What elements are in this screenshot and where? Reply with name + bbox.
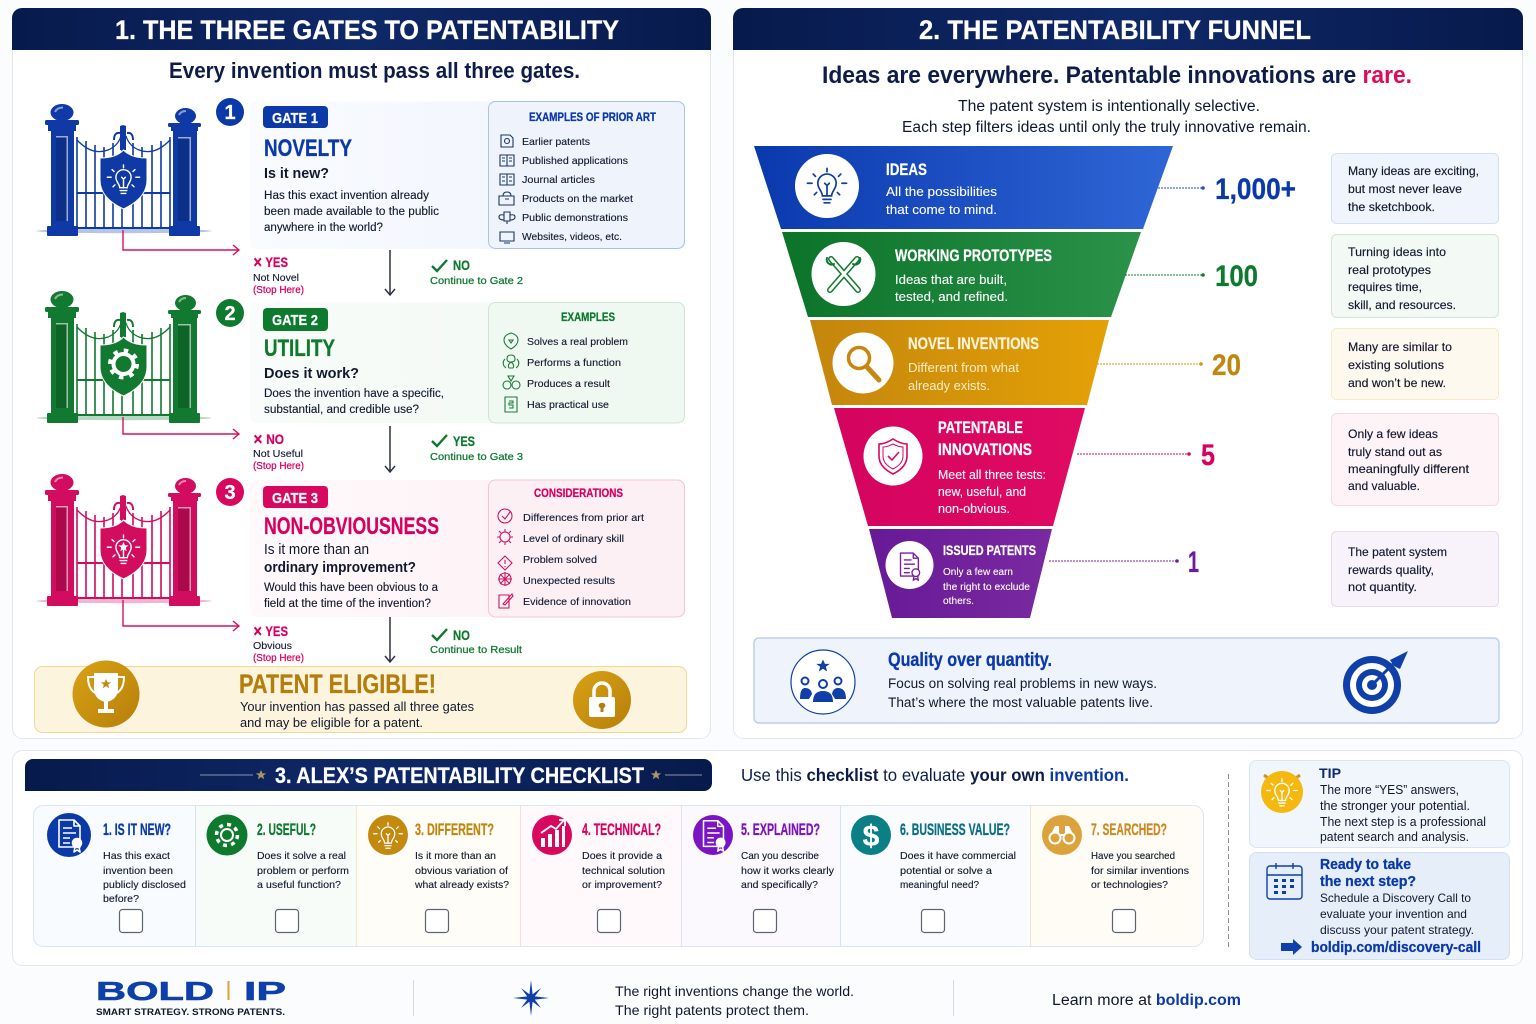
examples of prior art box: Public demonstrations bbox=[522, 212, 628, 224]
tip box: The more “YES” answers, bbox=[1320, 783, 1459, 797]
considerations box: Evidence of innovation bbox=[523, 596, 631, 608]
gate 2 no outcome: Not Useful bbox=[253, 448, 303, 460]
non-obviousness question: ordinary improvement? bbox=[264, 560, 416, 576]
logo: Bold IP: BOLD bbox=[96, 976, 214, 1006]
stat: 5 bbox=[1077, 439, 1215, 472]
gate 3 yes outcome: (Stop Here) bbox=[253, 652, 304, 664]
checklist item 3 bbox=[368, 815, 509, 932]
note card: issued bbox=[1332, 532, 1498, 606]
quality over quantity callout: That’s where the most valuable patents live. bbox=[888, 695, 1153, 710]
checklist item 6: $ bbox=[863, 820, 880, 853]
checklist item 5: and specifically? bbox=[741, 879, 818, 891]
funnel tier: working prototypes bbox=[782, 232, 1141, 317]
gate 1 yes outcome: ✕ YES bbox=[253, 255, 288, 270]
funnel tier: novel inventions: Different from what bbox=[908, 360, 1019, 375]
tip box: The next step is a professional bbox=[1320, 815, 1486, 829]
non-obviousness description: field at the time of the invention? bbox=[264, 598, 431, 610]
stat: 1,000+: 1,000+ bbox=[1215, 173, 1296, 206]
tip box: the stronger your potential. bbox=[1320, 799, 1470, 813]
funnel tier: patentable innovations: new, useful, and bbox=[938, 485, 1026, 499]
checklist item 5: 5. EXPLAINED? bbox=[741, 820, 820, 839]
gate 1 label: GATE 1 bbox=[272, 110, 318, 127]
funnel tier: novel inventions: already exists. bbox=[908, 378, 990, 393]
logo: Bold IP bbox=[96, 976, 286, 1018]
checklist item 2: a useful function? bbox=[257, 879, 341, 891]
funnel tier: issued patents bbox=[869, 529, 1052, 618]
gate 1 label bbox=[263, 106, 328, 128]
footer tagline: The right inventions change the world. bbox=[615, 983, 854, 999]
examples box: Has practical use bbox=[527, 399, 609, 411]
note card: issued: rewards quality, bbox=[1348, 563, 1434, 577]
considerations box: Level of ordinary skill bbox=[523, 533, 624, 545]
next step box: Ready to take bbox=[1320, 856, 1411, 873]
gate 2 no outcome: (Stop Here) bbox=[253, 460, 304, 472]
icon: tip lightbulb bbox=[1261, 771, 1303, 813]
checklist item 3: 3. DIFFERENT? bbox=[415, 820, 494, 839]
funnel tier: working prototypes: tested, and refined. bbox=[895, 289, 1008, 304]
icon: target with arrow bbox=[1343, 651, 1408, 714]
note card: issued: The patent system bbox=[1348, 545, 1447, 559]
gate 3 card bbox=[216, 478, 685, 617]
considerations box: CONSIDERATIONS bbox=[534, 486, 623, 500]
icon: blue gate with lightbulb shield bbox=[36, 104, 212, 236]
novelty question: Is it new? bbox=[264, 165, 329, 182]
examples of prior art box: Published applications bbox=[522, 155, 628, 167]
number badge 2 bbox=[216, 299, 244, 327]
arrow: gate 3 to result bbox=[385, 617, 395, 662]
panel: patentability checklist bbox=[12, 750, 1522, 966]
arrow: gate 2 to gate 3 bbox=[385, 426, 395, 472]
note card: prototypes: real prototypes bbox=[1348, 263, 1431, 277]
note card: prototypes: Turning ideas into bbox=[1348, 245, 1446, 259]
footer link: Learn more at boldip.com bbox=[1052, 992, 1241, 1009]
funnel tier: patentable innovations: INNOVATIONS bbox=[938, 440, 1032, 459]
considerations box: Unexpected results bbox=[523, 575, 615, 587]
note card: novel: existing solutions bbox=[1348, 358, 1444, 372]
checklist item 4 bbox=[532, 815, 665, 932]
note card: prototypes: requires time, bbox=[1348, 280, 1422, 294]
note card: ideas: the sketchbook. bbox=[1348, 200, 1435, 214]
checklist item 6: meaningful need? bbox=[900, 879, 979, 891]
quality over quantity callout: Quality over quantity. bbox=[888, 650, 1052, 671]
next step box: boldip.com/discovery-call bbox=[1311, 939, 1481, 956]
section heading 3 bbox=[25, 759, 712, 791]
checklist item 1: publicly disclosed bbox=[103, 879, 186, 891]
eligible title: PATENT ELIGIBLE! bbox=[239, 669, 436, 699]
checklist item 5: how it works clearly bbox=[741, 865, 835, 877]
examples box: Solves a real problem bbox=[527, 336, 628, 348]
checklist item 5: Can you describe bbox=[741, 850, 819, 862]
eligible description bbox=[240, 699, 474, 730]
note card: patentable: and valuable. bbox=[1348, 479, 1420, 493]
checklist columns bbox=[33, 805, 1204, 947]
stat: 20 bbox=[1097, 349, 1241, 382]
examples box: EXAMPLES bbox=[561, 310, 615, 324]
section heading 1 bbox=[12, 8, 711, 50]
non-obviousness description: Would this have been obvious to a bbox=[264, 582, 439, 594]
note card: patentable: truly stand out as bbox=[1348, 445, 1442, 459]
funnel tier: patentable innovations bbox=[834, 408, 1085, 526]
gate 1 no outcome: NO bbox=[453, 258, 470, 273]
considerations box bbox=[488, 480, 684, 617]
number badge 2: 2 bbox=[224, 303, 236, 325]
non-obviousness title: NON-OBVIOUSNESS bbox=[264, 513, 439, 540]
note card: issued: not quantity. bbox=[1348, 580, 1417, 594]
checklist item 7: or technologies? bbox=[1091, 879, 1168, 891]
gate 1 no outcome: Continue to Gate 2 bbox=[430, 275, 523, 287]
icon: pink gate with star bulb shield bbox=[36, 474, 212, 606]
gate 2 no outcome bbox=[253, 432, 304, 472]
checklist item 4: Does it provide a bbox=[582, 850, 662, 862]
checklist item 6: Does it have commercial bbox=[900, 850, 1016, 862]
utility title: UTILITY bbox=[264, 335, 335, 362]
section heading 2: 2. THE PATENTABILITY FUNNEL bbox=[919, 15, 1311, 45]
gate 2 card bbox=[216, 299, 685, 423]
eligible description: and may be eligible for a patent. bbox=[240, 715, 423, 730]
novelty description: been made available to the public bbox=[264, 206, 439, 218]
next step box: the next step? bbox=[1320, 873, 1416, 890]
novelty title: NOVELTY bbox=[264, 135, 352, 162]
panel: patentability funnel bbox=[733, 8, 1523, 738]
number badge 3: 3 bbox=[224, 482, 236, 504]
checklist item 7: Have you searched bbox=[1091, 850, 1175, 862]
checklist item 7: for similar inventions bbox=[1091, 865, 1189, 877]
number badge 1 bbox=[216, 98, 244, 126]
icon: compass star bbox=[513, 980, 549, 1016]
checklist item 3: obvious variation of bbox=[415, 865, 508, 877]
subheading: Every invention must pass all three gates. bbox=[169, 58, 580, 83]
gate 3 yes outcome: ✕ YES bbox=[253, 624, 288, 639]
icon: padlock bbox=[573, 671, 631, 729]
funnel tier: issued patents: the right to exclude bbox=[943, 581, 1030, 593]
footer tagline bbox=[615, 983, 854, 1018]
examples of prior art box: Earlier patents bbox=[522, 136, 590, 148]
note card: ideas: Many ideas are exciting, bbox=[1348, 164, 1479, 178]
checklist item 4: or improvement? bbox=[582, 879, 662, 891]
funnel intro text: Each step filters ideas until only the truly innovative remain. bbox=[902, 119, 1311, 136]
tip box bbox=[1250, 760, 1510, 848]
checklist item 2: Does it solve a real bbox=[257, 850, 346, 862]
gate 2 yes outcome: Continue to Gate 3 bbox=[430, 451, 523, 463]
funnel tier: ideas: IDEAS bbox=[886, 160, 927, 179]
novelty description bbox=[264, 190, 439, 234]
gate 1 yes outcome: (Stop Here) bbox=[253, 284, 304, 296]
checklist item 3: what already exists? bbox=[414, 879, 509, 891]
funnel tier: patentable innovations: non-obvious. bbox=[938, 502, 1010, 516]
note card: ideas: but most never leave bbox=[1348, 182, 1462, 196]
number badge 3 bbox=[216, 478, 244, 506]
logo: Bold IP: SMART STRATEGY. STRONG PATENTS. bbox=[96, 1007, 285, 1018]
checklist item 4: 4. TECHNICAL? bbox=[582, 820, 661, 839]
examples box: Performs a function bbox=[527, 357, 621, 369]
gate 3 no outcome bbox=[430, 628, 522, 656]
funnel tier: working prototypes: Ideas that are built, bbox=[895, 272, 1007, 287]
novelty description: Has this exact invention already bbox=[264, 190, 429, 202]
gate 2 yes outcome: YES bbox=[453, 434, 475, 449]
icon: calendar bbox=[1267, 863, 1302, 899]
note card: patentable bbox=[1332, 414, 1498, 506]
gate 3 label: GATE 3 bbox=[272, 490, 318, 507]
non-obviousness question: Is it more than an bbox=[264, 542, 369, 558]
utility description: substantial, and credible use? bbox=[264, 404, 419, 416]
arrow: gate 2 stop bbox=[123, 417, 239, 439]
gate 2 label: GATE 2 bbox=[272, 312, 318, 329]
checklist item 1: Has this exact bbox=[103, 850, 170, 862]
novelty description: anywhere in the world? bbox=[264, 222, 383, 234]
checklist item 1: before? bbox=[103, 893, 139, 905]
icon: team with star bbox=[791, 650, 855, 714]
stat: 20: 20 bbox=[1212, 349, 1241, 382]
patent eligible banner bbox=[34, 660, 686, 732]
note card: ideas bbox=[1332, 154, 1498, 224]
examples of prior art box: Websites, videos, etc. bbox=[522, 231, 622, 243]
stat: 1 bbox=[1049, 546, 1199, 579]
checklist item 7 bbox=[1042, 815, 1189, 932]
gate 3 yes outcome: Obvious bbox=[253, 640, 292, 652]
gate 1 yes outcome bbox=[253, 255, 304, 296]
funnel tier: novel inventions: NOVEL INVENTIONS bbox=[908, 334, 1039, 353]
checklist item 6: potential or solve a bbox=[900, 865, 992, 877]
checklist item 1: 1. IS IT NEW? bbox=[103, 820, 171, 839]
section heading 1: 1. THE THREE GATES TO PATENTABILITY bbox=[115, 15, 619, 45]
funnel headline: Ideas are everywhere. Patentable innovations are rare. bbox=[822, 62, 1412, 89]
next step box bbox=[1250, 852, 1510, 960]
checklist item 7: 7. SEARCHED? bbox=[1091, 820, 1167, 839]
funnel tier: patentable innovations: PATENTABLE bbox=[938, 418, 1023, 437]
quality over quantity callout: Focus on solving real problems in new ways. bbox=[888, 676, 1157, 691]
note card: novel: Many are similar to bbox=[1348, 340, 1452, 354]
section heading 2 bbox=[733, 8, 1523, 50]
funnel tier: working prototypes: WORKING PROTOTYPES bbox=[895, 246, 1052, 265]
checklist item 2: 2. USEFUL? bbox=[257, 820, 316, 839]
gate 3 no outcome: Continue to Result bbox=[430, 644, 522, 656]
gate 3 yes outcome bbox=[253, 624, 304, 664]
gate 1 card bbox=[216, 98, 685, 249]
stat: 1,000+ bbox=[1158, 173, 1296, 206]
note card: prototypes: skill, and resources. bbox=[1348, 298, 1456, 312]
gate 3 no outcome: NO bbox=[453, 628, 470, 643]
next step box: Schedule a Discovery Call to bbox=[1320, 891, 1471, 905]
examples of prior art box bbox=[488, 102, 684, 248]
utility description: Does the invention have a specific, bbox=[264, 388, 444, 400]
non-obviousness question bbox=[264, 542, 416, 576]
checklist item 3: Is it more than an bbox=[415, 850, 496, 862]
stat: 100: 100 bbox=[1215, 260, 1258, 293]
checklist item 6: 6. BUSINESS VALUE? bbox=[900, 820, 1010, 839]
funnel intro text bbox=[902, 98, 1311, 136]
checklist item 4: technical solution bbox=[582, 865, 665, 877]
note card: novel: and won’t be new. bbox=[1348, 376, 1446, 390]
stat: 1: 1 bbox=[1188, 546, 1199, 579]
icon: trophy bbox=[72, 660, 140, 728]
note card: prototypes bbox=[1332, 234, 1498, 318]
arrow: gate 1 to gate 2 bbox=[385, 250, 395, 295]
logo: Bold IP: IP bbox=[244, 976, 286, 1006]
funnel tier: issued patents: others. bbox=[943, 595, 974, 607]
gate 2 yes outcome bbox=[430, 434, 523, 463]
examples of prior art box: Products on the market bbox=[522, 193, 633, 205]
number badge 1: 1 bbox=[224, 102, 236, 124]
examples box: Produces a result bbox=[527, 378, 610, 390]
tip box: patent search and analysis. bbox=[1320, 830, 1469, 844]
gate 1 no outcome bbox=[430, 258, 523, 287]
checklist item 1 bbox=[47, 813, 186, 932]
arrow: gate 3 stop bbox=[123, 600, 239, 631]
section heading 3: 3. ALEX’S PATENTABILITY CHECKLIST bbox=[275, 763, 644, 788]
stat: 100 bbox=[1125, 260, 1258, 293]
next step box: evaluate your invention and bbox=[1320, 907, 1467, 921]
footer bbox=[96, 976, 1241, 1018]
utility description bbox=[264, 388, 444, 416]
checklist item 2 bbox=[206, 814, 349, 932]
gate 2 label bbox=[263, 308, 328, 331]
tip box: TIP bbox=[1319, 765, 1341, 781]
examples of prior art box: Journal articles bbox=[522, 174, 595, 186]
examples of prior art box: EXAMPLES OF PRIOR ART bbox=[529, 110, 657, 124]
gate 1 yes outcome: Not Novel bbox=[253, 272, 299, 284]
checklist item 2: problem or perform bbox=[257, 865, 349, 877]
quality over quantity callout bbox=[754, 638, 1499, 723]
examples box bbox=[488, 302, 684, 423]
arrow: gate 1 stop bbox=[123, 230, 239, 255]
next step box: discuss your patent strategy. bbox=[1320, 923, 1474, 937]
note card: patentable: Only a few ideas bbox=[1348, 427, 1438, 441]
footer tagline: The right patents protect them. bbox=[615, 1002, 809, 1018]
checklist item 5 bbox=[693, 815, 835, 932]
eligible description: Your invention has passed all three gates bbox=[240, 699, 474, 714]
note card: novel bbox=[1332, 328, 1498, 400]
funnel tier: issued patents: ISSUED PATENTS bbox=[943, 542, 1036, 558]
note card: patentable: meaningfully different bbox=[1348, 462, 1470, 476]
funnel tier: ideas: All the possibilities bbox=[886, 184, 998, 199]
icon: green gate with gear shield bbox=[36, 291, 212, 423]
funnel tier: ideas bbox=[754, 146, 1173, 229]
funnel tier: patentable innovations: Meet all three tests: bbox=[938, 468, 1046, 482]
checklist item 1: invention been bbox=[103, 865, 173, 877]
stat: 5: 5 bbox=[1201, 439, 1215, 472]
checklist intro: Use this checklist to evaluate your own invention. bbox=[741, 765, 1129, 785]
considerations box: Problem solved bbox=[523, 554, 597, 566]
icon: arrow bbox=[1281, 939, 1302, 955]
checklist item 6 bbox=[851, 815, 1016, 932]
considerations box: Differences from prior art bbox=[523, 512, 644, 524]
panel: three gates to patentability bbox=[12, 8, 711, 738]
non-obviousness description bbox=[264, 582, 439, 610]
funnel tier: novel inventions bbox=[810, 320, 1109, 405]
gate 3 label bbox=[263, 486, 328, 508]
funnel tier: issued patents: Only a few earn bbox=[943, 566, 1013, 578]
funnel tier: ideas: that come to mind. bbox=[886, 202, 997, 217]
utility question: Does it work? bbox=[264, 365, 359, 382]
gate 2 no outcome: ✕ NO bbox=[253, 432, 284, 447]
funnel intro text: The patent system is intentionally selective. bbox=[958, 98, 1260, 115]
